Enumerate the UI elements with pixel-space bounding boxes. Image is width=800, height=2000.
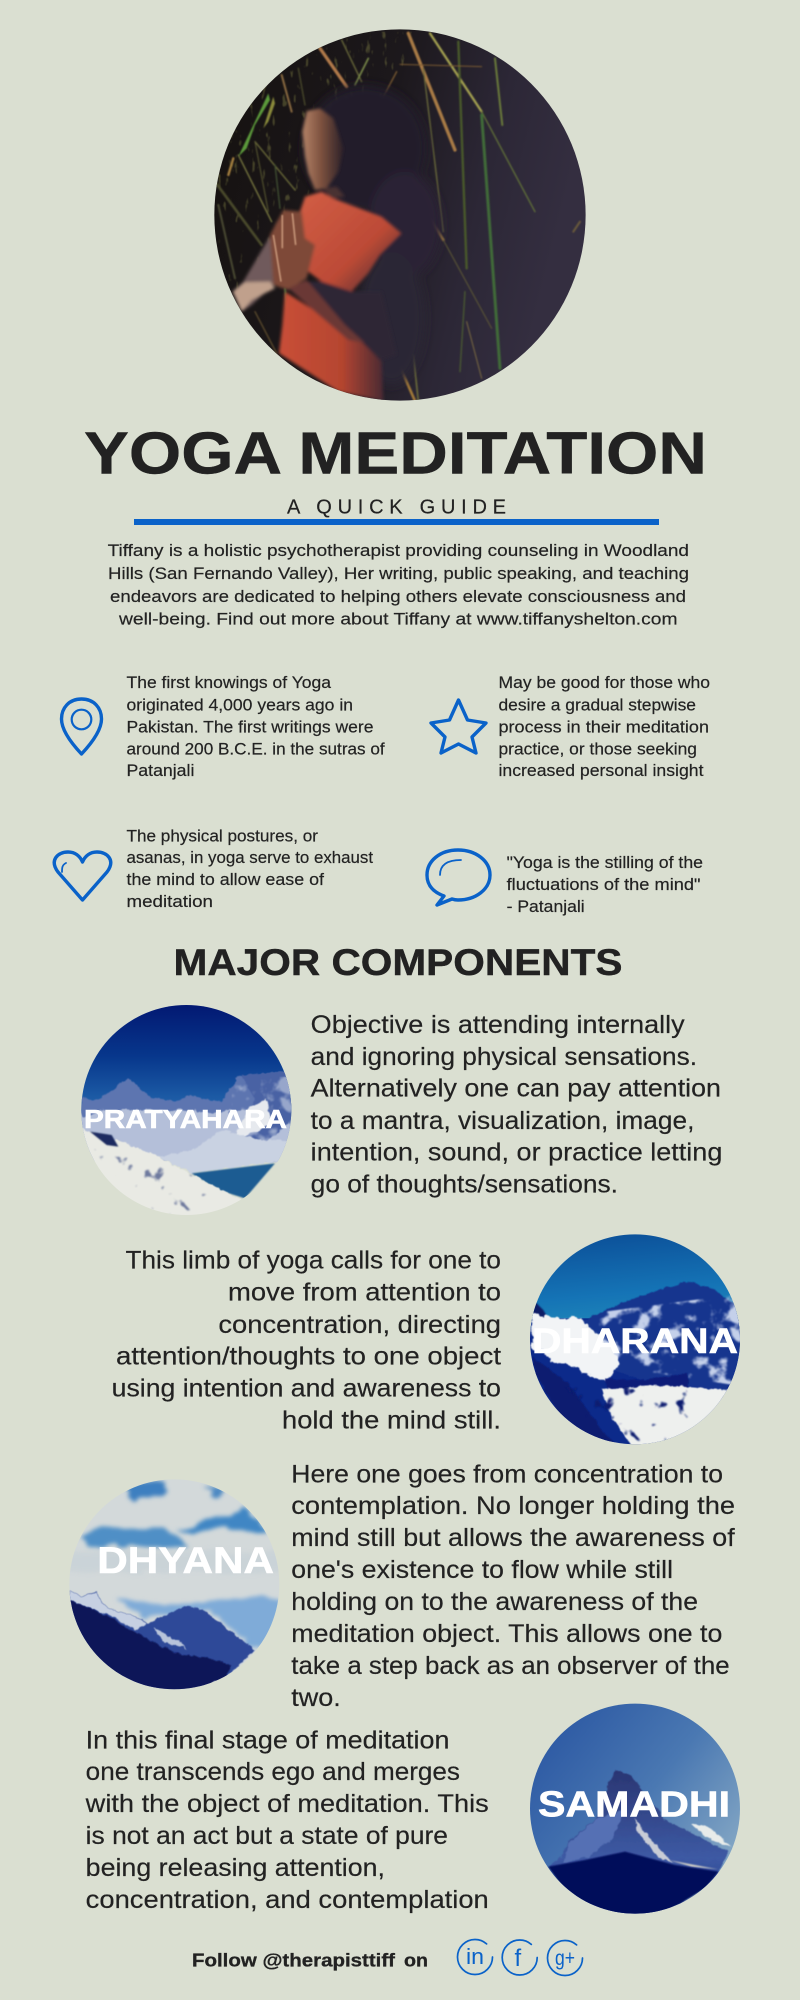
fact: origins: originated 4,000 years ago in: [126, 696, 353, 714]
fact: asanas: asanas, in yoga serve to exhaust: [126, 849, 373, 867]
description: take a step back as an observer of the: [291, 1652, 730, 1680]
fact: origins: around 200 B.C.E. in the sutras of: [126, 740, 385, 758]
fact: origins: The first knowings of Yoga: [126, 674, 332, 692]
footer: follow line: Follow @therapisttiff: [192, 1950, 396, 1971]
description: to a mantra, visualization, image,: [311, 1107, 694, 1135]
fact: who benefits: increased personal insight: [498, 762, 704, 780]
subtitle: A QUICK GUIDE: [287, 496, 506, 518]
description: with the object of meditation. This: [85, 1790, 489, 1818]
fact: who benefits: process in their meditation: [498, 718, 709, 736]
description: being releasing attention,: [86, 1854, 385, 1882]
description: holding on to the awareness of the: [291, 1588, 698, 1616]
label: SAMADHI: [538, 1784, 730, 1824]
label: PRATYAHARA: [84, 1106, 287, 1134]
label: DHARANA: [532, 1322, 738, 1361]
intro paragraph: Hills (San Fernando Valley), Her writing, public speaking, and teaching: [108, 564, 689, 583]
intro paragraph: [108, 541, 689, 628]
description: contemplation. No longer holding the: [291, 1492, 735, 1520]
description: concentration, and contemplation: [86, 1886, 489, 1914]
description: go of thoughts/sensations.: [311, 1171, 618, 1199]
icon: linkedin: in: [466, 1944, 484, 1969]
panel: dharana: [112, 1230, 748, 1452]
description: and ignoring physical sensations.: [311, 1043, 697, 1071]
description: [85, 1726, 489, 1914]
icon: facebook: [502, 1940, 537, 1975]
description: attention/thoughts to one object: [116, 1342, 501, 1370]
label: DHYANA: [97, 1540, 274, 1581]
description: intention, sound, or practice letting: [311, 1138, 722, 1166]
description: concentration, directing: [218, 1311, 501, 1339]
hero photo: woman in prayer pose among bamboo: [212, 27, 588, 403]
hair: [303, 85, 427, 212]
fact: origins: Pakistan. The first writings were: [126, 718, 374, 736]
icon: google plus: g+: [555, 1947, 575, 1970]
description: one's existence to flow while still: [291, 1556, 673, 1584]
description: Here one goes from concentration to: [291, 1460, 723, 1488]
description: one transcends ego and merges: [86, 1758, 460, 1786]
fact: who benefits: practice, or those seeking: [498, 740, 697, 758]
quote: Patanjali: "Yoga is the stilling of the: [507, 854, 703, 872]
description: [291, 1460, 735, 1712]
icon: speech bubble: [427, 850, 490, 905]
description: meditation object. This allows one to: [291, 1620, 722, 1648]
quote: Patanjali: fluctuations of the mind": [507, 876, 701, 894]
quote: Patanjali: [507, 854, 703, 916]
fact: asanas: meditation: [126, 893, 213, 911]
blue underline: [134, 519, 659, 525]
fact: who benefits: [498, 674, 710, 780]
description: two.: [291, 1684, 341, 1712]
title: YOGA MEDITATION: [84, 420, 707, 486]
face: [302, 108, 343, 190]
panel: samadhi: [85, 1700, 745, 1920]
fact: origins: Patanjali: [126, 762, 194, 780]
description: This limb of yoga calls for one to: [126, 1247, 501, 1275]
description: is not an act but a state of pure: [86, 1822, 448, 1850]
description: Alternatively one can pay attention: [311, 1075, 721, 1103]
description: In this final stage of meditation: [86, 1726, 449, 1754]
intro paragraph: endeavors are dedicated to helping others elevate consciousness and: [110, 587, 686, 606]
description: [112, 1247, 501, 1434]
heading: major components: MAJOR COMPONENTS: [174, 942, 622, 983]
intro paragraph: Tiffany is a holistic psychotherapist providing counseling in Woodland: [108, 541, 689, 560]
description: hold the mind still.: [282, 1406, 501, 1434]
description: move from attention to: [228, 1279, 501, 1307]
image: matterhorn-like peak: [525, 1700, 745, 1920]
description: mind still but allows the awareness of: [291, 1524, 735, 1552]
fact: who benefits: desire a gradual stepwise: [498, 696, 696, 714]
icon: star: [431, 700, 486, 753]
icon: heart: [54, 852, 111, 900]
intro paragraph: well-being. Find out more about Tiffany at www.tiffanyshelton.com: [118, 610, 678, 628]
fact: asanas: the mind to allow ease of: [126, 871, 324, 889]
fact: who benefits: May be good for those who: [498, 674, 710, 692]
icon: linkedin: [458, 1940, 492, 1974]
image: snowy mountains and lake: [81, 1005, 292, 1215]
image: dark snow-streaked mountain: [530, 1234, 740, 1444]
icon: map pin: [62, 699, 102, 754]
quote: Patanjali: - Patanjali: [507, 898, 585, 916]
image: cloudy sky over forest peaks: [65, 1475, 285, 1695]
description: [311, 1011, 722, 1199]
icon: google plus: [548, 1940, 582, 1976]
description: Objective is attending internally: [311, 1011, 685, 1039]
fact: asanas: [126, 827, 373, 911]
footer: follow line: on: [404, 1950, 428, 1971]
fact: asanas: The physical postures, or: [126, 827, 319, 845]
panel: dhyana: [65, 1460, 735, 1712]
icon: facebook: f: [514, 1945, 522, 1972]
description: using intention and awareness to: [112, 1374, 501, 1402]
fact: origins: [126, 674, 385, 780]
panel: pratyahara: [75, 1000, 722, 1220]
